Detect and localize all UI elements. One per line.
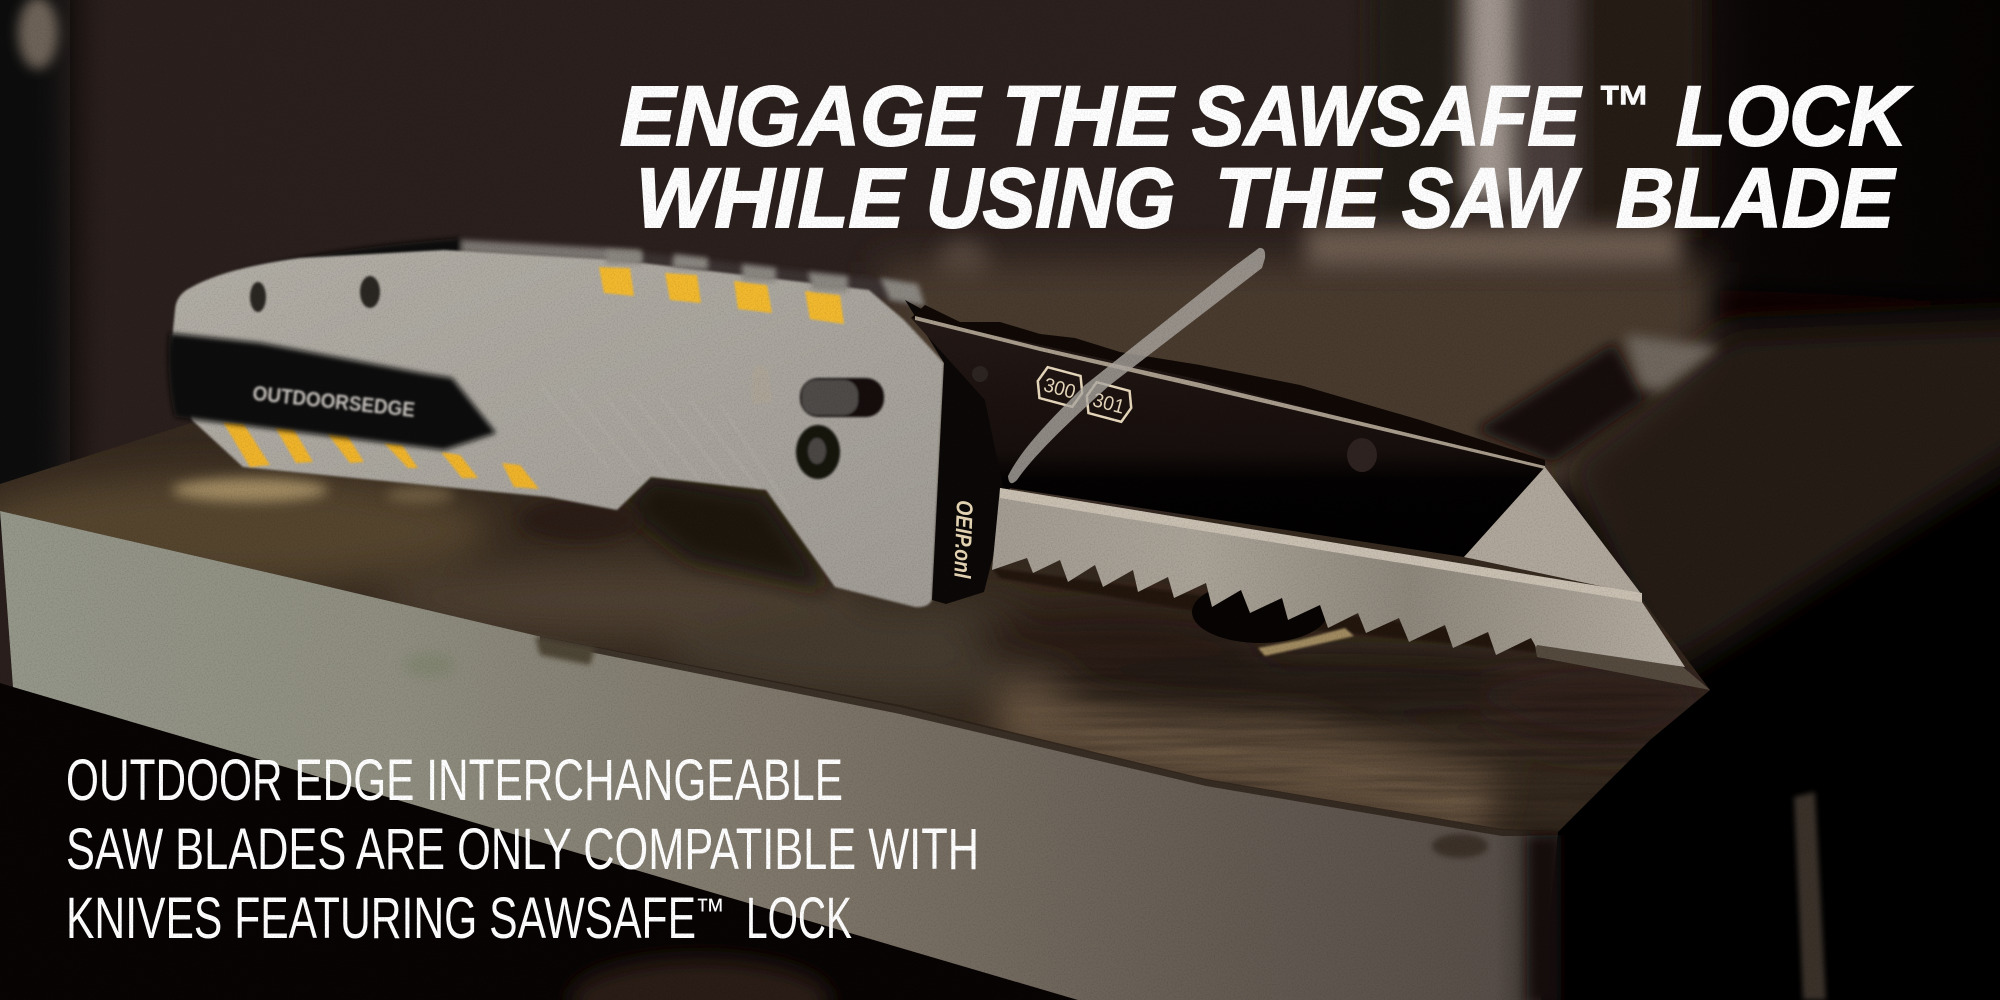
blade tip triangle [1464,467,1642,595]
lower bevel [1534,640,1710,690]
black pocket clip [168,333,496,450]
headline line 2: THE [1215,151,1383,245]
yellow bottom stripes [223,422,539,489]
bottom shadow patch [570,958,830,1000]
headline line 1: LOCK [1676,69,1912,163]
surface light and shadow [0,475,1720,840]
blade screw [1347,438,1377,472]
headline [620,69,1912,245]
knife [168,238,1710,690]
bottom-left shadow [0,680,1078,1000]
pivot screw [796,425,840,479]
thumb slider [800,378,884,417]
hole in workbench [1192,581,1328,643]
serrated saw blade [992,488,1685,667]
compatibility note: OUTDOOR EDGE INTERCHANGEABLE [66,748,843,813]
black bolster [905,300,1010,604]
headline line 2: USING [926,151,1175,245]
headline line 1: THE [1002,69,1176,163]
clip logo: OUTDOORSEDGE [251,382,416,422]
badge 301 [1083,381,1135,423]
headline line 2: SAW [1402,151,1582,245]
headline line 2 [636,151,1897,245]
compatibility note: KNIVES FEATURING SAWSAFE [66,886,696,951]
workbench top surface [0,423,1710,832]
background right block [1476,290,2000,1000]
black blade [911,318,1545,557]
compatibility note: SAW BLADES ARE ONLY COMPATIBLE WITH [66,817,979,882]
workbench front face [0,511,1558,1000]
handle spine [235,238,925,306]
bolster logo: OEIP.onl [949,500,978,579]
headline line 1: ENGAGE [620,69,983,163]
saw spine highlight [1000,488,1642,602]
metal clips [606,250,925,306]
wood shavings [1258,628,1354,656]
compatibility note: ™ [695,892,725,930]
front face details [404,636,1561,1000]
handle body [172,250,944,607]
badge 301: 301 [1090,389,1127,419]
headline line 1: SAWSAFE [1192,69,1583,163]
callout line [1008,248,1265,483]
compatibility note [66,748,979,951]
badge 300: 300 [1041,374,1078,404]
tooth shadows [992,568,1537,652]
blade serrated top edge [911,305,1545,470]
lock icon [752,365,772,404]
compatibility note: LOCK [746,886,852,951]
blade highlight edge [915,316,1545,469]
handle holes [250,276,380,312]
headline line 2: BLADE [1616,151,1897,245]
headline line 1 [620,69,1912,163]
handle ribbed texture [668,478,760,490]
rivet [972,366,988,382]
headline line 1: ™ [1596,73,1650,140]
headline line 2: WHILE [636,151,907,245]
badge 300 [1034,366,1086,408]
yellow top marks [599,267,844,324]
